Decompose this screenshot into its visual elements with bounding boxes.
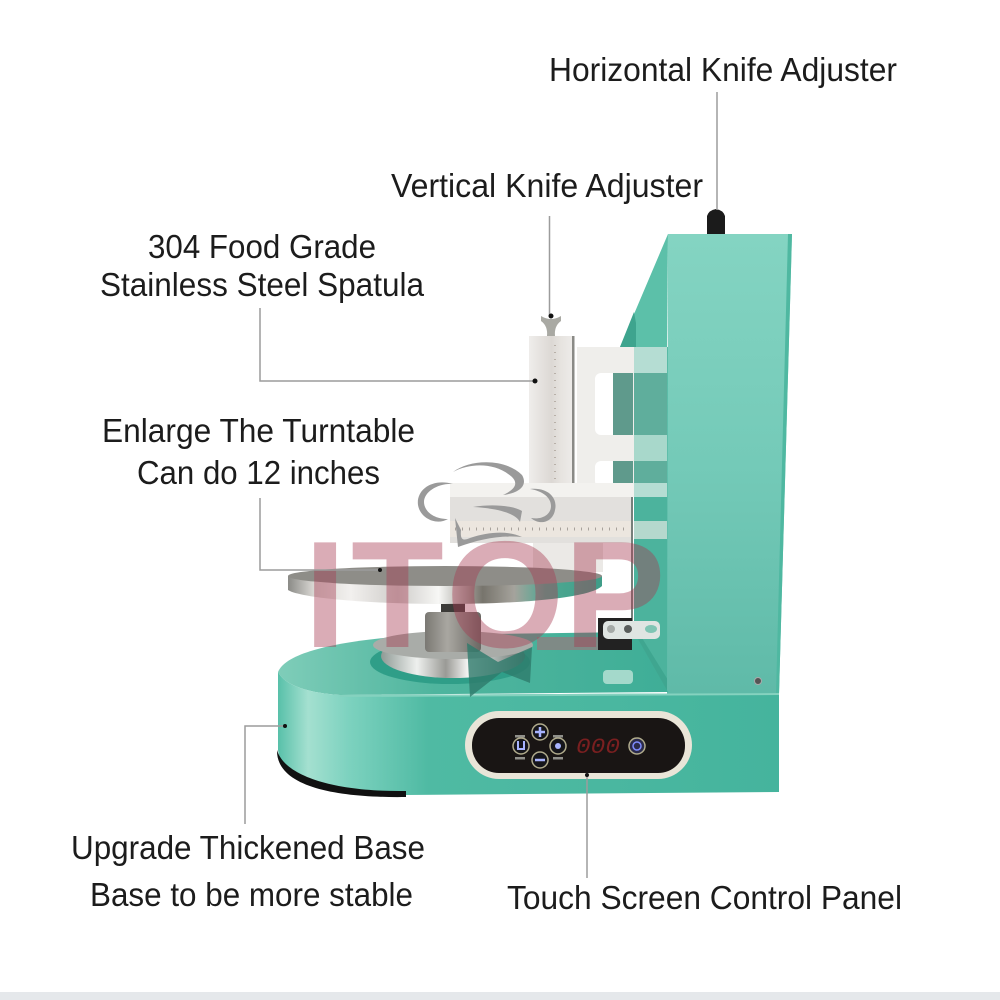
- turntable disc: [288, 566, 602, 604]
- callout: touch screen control panel: [507, 773, 902, 916]
- turntable post: [425, 600, 481, 652]
- horizontal knife plate: [450, 483, 667, 627]
- callout: thickened base: Upgrade Thickened Base: [71, 829, 425, 866]
- tower front face: [667, 234, 792, 694]
- button captions: [515, 735, 563, 760]
- callout: thickened base: Base to be more stable: [90, 876, 413, 913]
- vertical bracket with windows: [577, 347, 667, 497]
- vertical knife ruler: [529, 316, 574, 484]
- watermark logo: [304, 462, 665, 697]
- base top surface: [278, 632, 668, 695]
- turntable lower ring: [370, 631, 533, 684]
- rail and slider block: [537, 618, 660, 684]
- callout: thickened base: [71, 724, 425, 913]
- bottom strip: [0, 992, 1000, 1000]
- base top edge highlight: [340, 694, 779, 696]
- callout: turntable: [102, 412, 415, 572]
- minus button: [532, 752, 548, 768]
- tower right edge: [776, 234, 792, 694]
- callout: turntable: Enlarge The Turntable: [102, 412, 415, 449]
- callout: turntable: Can do 12 inches: [137, 454, 380, 491]
- callout: touch screen control panel: Touch Screen Control Panel: [507, 879, 902, 916]
- base front: [278, 672, 779, 795]
- left button: [513, 738, 529, 754]
- ITOP wordmark: ITOP: [304, 510, 665, 680]
- tower side panel: [620, 234, 668, 692]
- black rubber strip: [277, 750, 406, 797]
- bow tie mark: [467, 643, 532, 697]
- callout: spatula: [100, 228, 538, 384]
- callout: spatula: Stainless Steel Spatula: [100, 266, 425, 303]
- red display: 000: [576, 735, 620, 760]
- control panel: [465, 711, 692, 779]
- horizontal adjuster knob: [707, 209, 725, 234]
- callout: spatula: 304 Food Grade: [148, 228, 376, 265]
- machine illustration: [277, 209, 792, 797]
- tower screw: [754, 678, 762, 684]
- power button: [629, 738, 645, 754]
- callout: horizontal knife adjuster: Horizontal Knife Adjuster: [549, 51, 897, 88]
- callout: vertical knife adjuster: Vertical Knife Adjuster: [391, 167, 703, 204]
- right button: [550, 738, 566, 754]
- chef hat mark: [418, 462, 556, 547]
- plus button: [532, 724, 548, 740]
- callout: vertical knife adjuster: [391, 167, 703, 318]
